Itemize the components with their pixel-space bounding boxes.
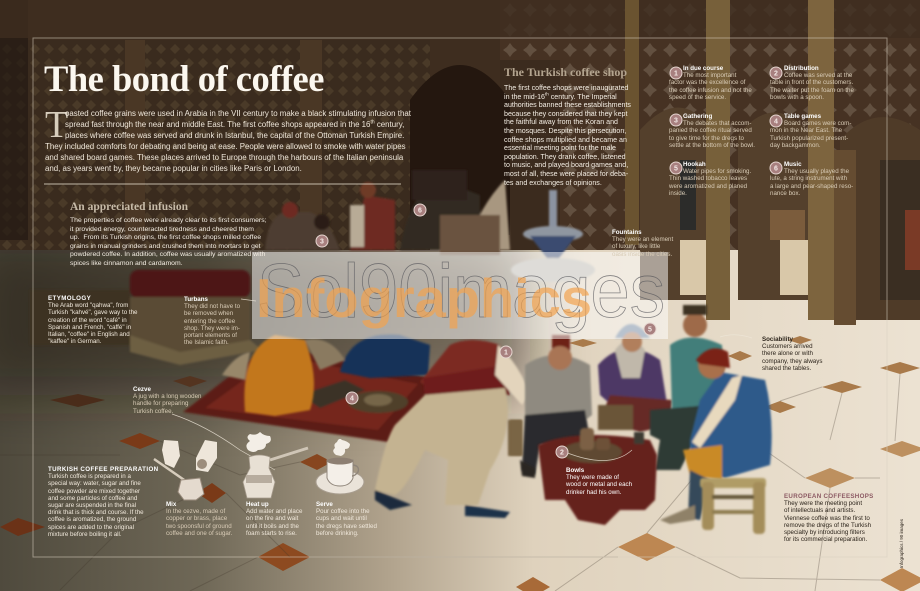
intro paragraph: and shared board games. These places arrived to Europe through the harbours of the Italian peninsula [45,153,403,162]
note: table games: day backgammon. [770,142,821,149]
floor tiles [0,336,920,591]
cushions and platform [30,270,262,365]
panel: Turkish coffee preparation [48,466,159,538]
fountain [511,190,595,282]
seated patrons on carpet [222,334,430,416]
body: to music, and played board games and, [504,161,628,169]
body: essential meeting point for the male [504,144,616,152]
note: gathering: to give time for the dregs to [669,135,744,142]
marker 2 [770,67,782,79]
step: serve: before drinking. [316,530,359,537]
note: sociability: Customers arrived [762,343,813,350]
panel: Turkish coffee preparation: coffee is aromatized, the ground [48,516,136,523]
scene marker 4 [346,392,358,404]
panel: Turkish coffee preparation: coffee powder are mixed together [48,488,140,495]
note: hookah: were aromatized and planed [669,183,747,190]
step: mix: coffee and one of sugar. [166,530,232,537]
body: the faithful away from the Koran and [504,118,618,126]
note: distribution: Coffee was served at the [784,72,852,79]
stool [700,478,766,534]
intro paragraph: spread fast through the near and middle East. The first coffee shops appeared in the 16th century, [65,119,404,129]
panel: Turkish coffee preparation: mixture before boiling it all. [48,531,122,538]
marker 4 [770,115,782,127]
panel: European coffeeshops: They were the meeting point [784,500,862,507]
note: hookah: Hookah [683,161,706,168]
note: gathering: The debates that accom- [683,120,751,127]
note: sociability: there alone or with [762,350,813,357]
heading: An appreciated infusion [70,201,188,213]
body [504,84,631,187]
body: population. They drank coffee, listened [504,153,626,161]
watermark: Infographics: Infographics [256,267,592,329]
panel: European coffeeshops: for its commercial preparation. [784,536,867,543]
standing man serving coffee [375,340,530,518]
note: turbans: be removed when [184,310,233,317]
body: the mosques. Despite this persecution, [504,127,626,135]
note: turbans: They did not have to [184,303,240,310]
marker 1: 1 [674,70,678,78]
step: mix [166,501,232,537]
watermark box [252,249,668,339]
scene marker 1: 1 [504,350,508,356]
note: turbans: Turbans [184,296,208,303]
note: in due course: the coffee infusion and not the [669,87,752,94]
note: table games: Turkish popularized present- [770,135,848,142]
note: music: They usually played the [784,168,849,175]
step: mix: In the cezve, made of [166,508,225,515]
marker 2: 2 [774,70,778,78]
note: table games: Board games were com- [784,120,851,127]
panel: European coffeeshops: specialty by introducing filters [784,529,865,536]
scene marker 5 [644,323,656,335]
note: in due course [669,65,752,101]
marker 3: 3 [674,118,678,124]
panel: European coffeeshops [784,493,874,543]
title: The bond of coffee [44,58,324,99]
step: heat up [246,501,302,537]
note: turbans [184,296,240,346]
carpet [183,345,440,442]
scene marker 2: 2 [560,450,564,456]
note: gathering [669,113,755,149]
body: most of all, these were placed for deba- [504,170,628,178]
note: bowls: Bowls [566,467,584,474]
man in teal [650,305,725,470]
body: it provided energy, counteracted tiredness and cheered them [70,226,254,233]
note: cezve: Cezve [133,386,151,393]
note: in due course: speed of the service. [669,94,726,101]
body [70,217,267,267]
panel: Turkish coffee preparation: special way: water, sugar and fine [48,480,141,487]
note: bowls: They were made of [566,474,619,481]
leader lines [172,299,752,470]
note: distribution: Distribution [784,65,819,72]
icons: numbered markers [316,67,782,458]
icon: hands with cezve [154,440,217,500]
step: heat up: until it boils and the [246,523,299,530]
scene marker 4: 4 [350,396,354,402]
scene marker 6 [414,204,426,216]
note: etymology: creation of the word "café" in [48,317,127,324]
note: etymology: The Arab word "qahwa", from [48,302,128,309]
panel: Turkish coffee preparation: sugar are suspended in the final [48,502,136,509]
scene marker 6: 6 [418,208,422,214]
note: music: lute, a string instrument with [770,175,847,182]
note: turbans: shop. They were im- [184,325,240,332]
scene marker 5: 5 [648,326,652,334]
body: in the mid-16th century. The Imperial [504,91,617,101]
note: turbans: portant elements of [184,332,237,339]
note: hookah: inside. [669,190,687,197]
note: etymology: Italian, "coffee" in English and [48,331,130,338]
note: sociability: Sociability [762,336,793,343]
intro paragraph: and, as years went by, they became popular in cities like Paris or London. [45,164,302,173]
body: spices like cinnamon and cardamom. [70,260,183,267]
drop cap: T [45,104,68,146]
note: gathering: Gathering [683,113,712,120]
note: in due course: In due course [683,65,723,72]
rule under intro [44,183,401,185]
note: distribution: table in front of the customers. [770,79,853,86]
step: mix: Mix [166,501,176,508]
step: mix: two spoonsful of ground [166,523,232,530]
note: in due course: factor was the excellence of [669,79,745,86]
note: etymology: "kaffee" in German. [48,338,101,345]
note: etymology: ETYMOLOGY [48,295,91,302]
panel: European coffeeshops: EUROPEAN COFFEESHOPS [784,493,874,500]
note: music: a large and pear-shaped reso- [770,183,853,190]
step: serve: Pour coffee into the [316,508,370,515]
body: The first coffee shops were inaugurated [504,84,628,92]
note: etymology: Spanish and French, "caffé" in [48,324,131,331]
step: mix: copper or brass, place [166,515,227,522]
credit: Infographics / 90 images [899,519,904,568]
note: cezve [133,386,202,415]
body: tes and exchanges of opinions. [504,179,602,187]
panel: Turkish coffee preparation: drink that is thick and course. If the [48,509,144,516]
man in blue vest [660,348,772,524]
panel: European coffeeshops: remove the dregs of the Turkish [784,522,871,529]
step: heat up: Heat up [246,501,269,508]
panel: an appreciated infusion [70,201,267,267]
note: bowls: wood or metal and each [566,481,632,488]
note: etymology [48,295,138,345]
watermark: Sol90images: Sol90images [257,249,665,334]
note: bowls [566,467,632,496]
intro paragraph: oasted coffee grains were used in Arabia in the VII century to make a black stimulating infusion that [65,109,411,118]
table with coffee service [510,420,657,525]
note: fountains: Fountains [612,229,642,236]
note: fountains: of luxury, like little [612,243,660,250]
note: cezve: Turkish coffee. [133,408,173,415]
marker 5 [670,162,682,174]
marker 6 [770,162,782,174]
back wall [0,0,920,250]
marker 4: 4 [774,118,778,126]
man in purple [598,324,672,432]
man in grey [508,335,592,475]
body: grains in manual grinders and crushed them into mortars to get [70,243,261,250]
panel: European coffeeshops: Viennese coffee was the first to [784,515,870,522]
note: sociability: shared the tables. [762,365,811,372]
step: serve [316,501,377,537]
intro text [45,104,411,173]
scene marker 2 [556,446,568,458]
note: table games: mon in the Near East. The [770,127,842,134]
columns and arches [625,0,920,325]
note: bowls: drinker had his own. [566,489,621,496]
note: sociability: company, they always [762,358,822,365]
note: table games [770,113,852,149]
note: fountains: They were an element [612,236,673,243]
note: cezve: handle for preparing [133,400,188,407]
body: coffee shops multiplied and became an [504,136,627,144]
note: etymology: Turkish "kahvé", gave way to the [48,309,137,316]
step: heat up: on the fire and wait [246,515,298,522]
floor [0,235,920,591]
note: distribution: The waiter put the foam on the [770,87,854,94]
step: heat up: foam starts to rise. [246,530,297,537]
panel: the Turkish coffee shop [504,65,631,187]
body: powdered coffee. In addition, coffee was usually aromatized with [70,251,265,258]
note: music: Music [784,161,802,168]
note: fountains: oasis inside the cities. [612,251,672,258]
marker 5: 5 [674,166,678,172]
panel: Turkish coffee preparation: Turkish coffee is prepared in a [48,473,131,480]
note: hookah: Water pipes for smoking. [683,168,751,175]
panel: Turkish coffee preparation: and some particles of coffee and [48,495,137,502]
note: music [770,161,853,197]
icon: coffee cup on saucer [316,439,364,494]
note: sociability [762,336,822,372]
body: up. From its Turkish origins, the first coffee shops milled coffee [70,234,261,241]
marker 1 [670,67,682,79]
scene marker 3 [316,235,328,247]
note: music: nance box. [770,190,800,197]
marker 6: 6 [774,166,778,172]
note: distribution: bowls with a spoon. [770,94,824,101]
panel: Turkish coffee preparation: spices are added to the original [48,524,134,531]
body: The properties of coffee were already clear to its first consumers; [70,217,267,224]
note: hookah [669,161,751,197]
note: turbans: the Islamic faith. [184,339,229,346]
note: fountains [612,229,674,258]
note: gathering: panied the coffee ritual served [669,127,752,134]
scene marker 1 [500,346,512,358]
marker 3 [670,114,682,126]
intro paragraph: They included comforts for debating and being at ease. People were allowed to smoke with water pipes [45,142,406,151]
step: serve: cups and wait until [316,515,367,522]
note: table games: Table games [784,113,821,120]
note: hookah: Thin washed tobacco leaves [669,175,747,182]
note: distribution [770,65,854,101]
heading: The Turkish coffee shop [504,65,627,79]
panel: Turkish coffee preparation: TURKISH COFFEE PREPARATION [48,466,159,473]
intro paragraph: places where coffee was served and drunk in Istanbul, the capital of the Ottoman Turkish Empire. [65,131,404,140]
note: in due course: The most important [683,72,736,79]
intro paragraph [45,109,411,173]
note: turbans: entering the coffee [184,318,235,325]
body: authorities banned these establishments [504,101,631,109]
note: gathering: settle at the bottom of the bowl. [669,142,755,149]
body: because they considered that they kept [504,110,627,118]
icon: cezve on heat [243,432,308,498]
background patrons [265,170,510,255]
note: cezve: A jug with a long wooden [133,393,201,400]
panel: European coffeeshops: of intellectuals and artists. [784,507,855,514]
step: heat up: Add water and place [246,508,302,515]
step: serve: Serve [316,501,333,508]
scene marker 3: 3 [320,238,324,246]
step: serve: the dregs have settled [316,523,377,530]
